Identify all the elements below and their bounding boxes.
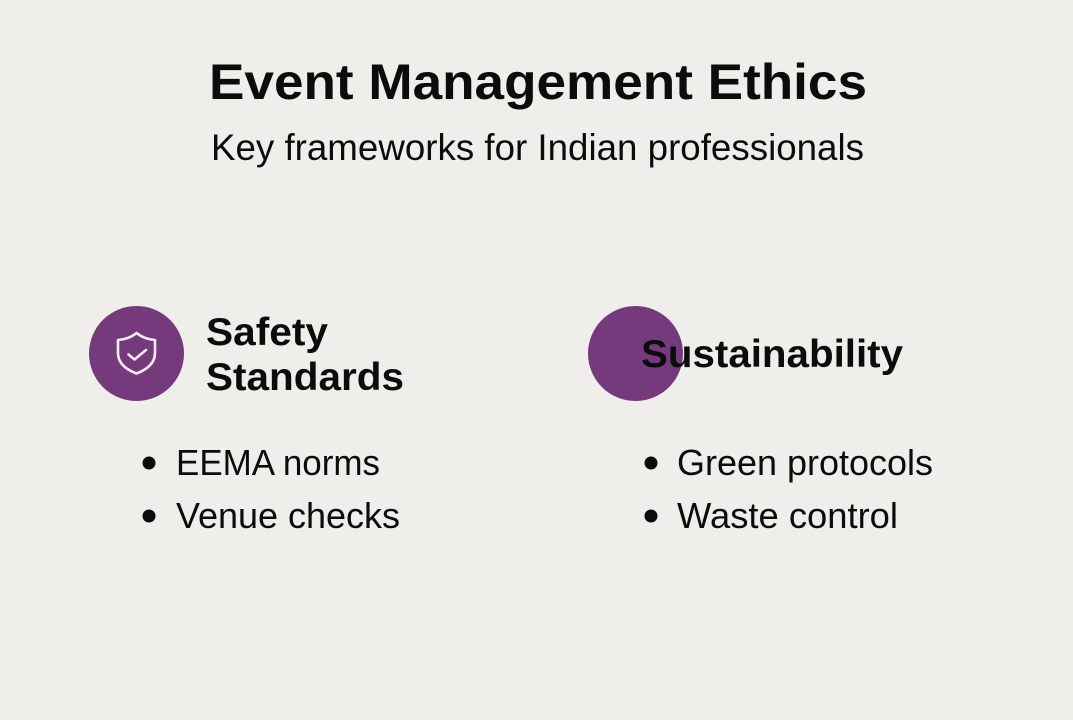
bullet list: sustainability <box>644 442 933 536</box>
bullet list: sustainability: Waste control <box>677 495 898 536</box>
subtitle: Key frameworks for Indian professionals <box>211 127 864 168</box>
icon: purple circle <box>588 306 683 401</box>
bullet list: safety standards <box>142 442 400 536</box>
bullet list: safety standards: EEMA norms <box>176 442 380 483</box>
panel: sustainability <box>588 306 933 536</box>
heading: safety standards: Standards <box>206 356 404 399</box>
title: Event Management Ethics <box>209 54 867 110</box>
bullet list: sustainability: Green protocols <box>677 442 933 483</box>
heading: safety standards: Safety <box>206 311 328 354</box>
icon: shield with check <box>89 306 184 401</box>
heading: sustainability: Sustainability <box>641 333 903 376</box>
panel: safety standards <box>89 306 404 536</box>
bullet list: safety standards: Venue checks <box>176 495 400 536</box>
